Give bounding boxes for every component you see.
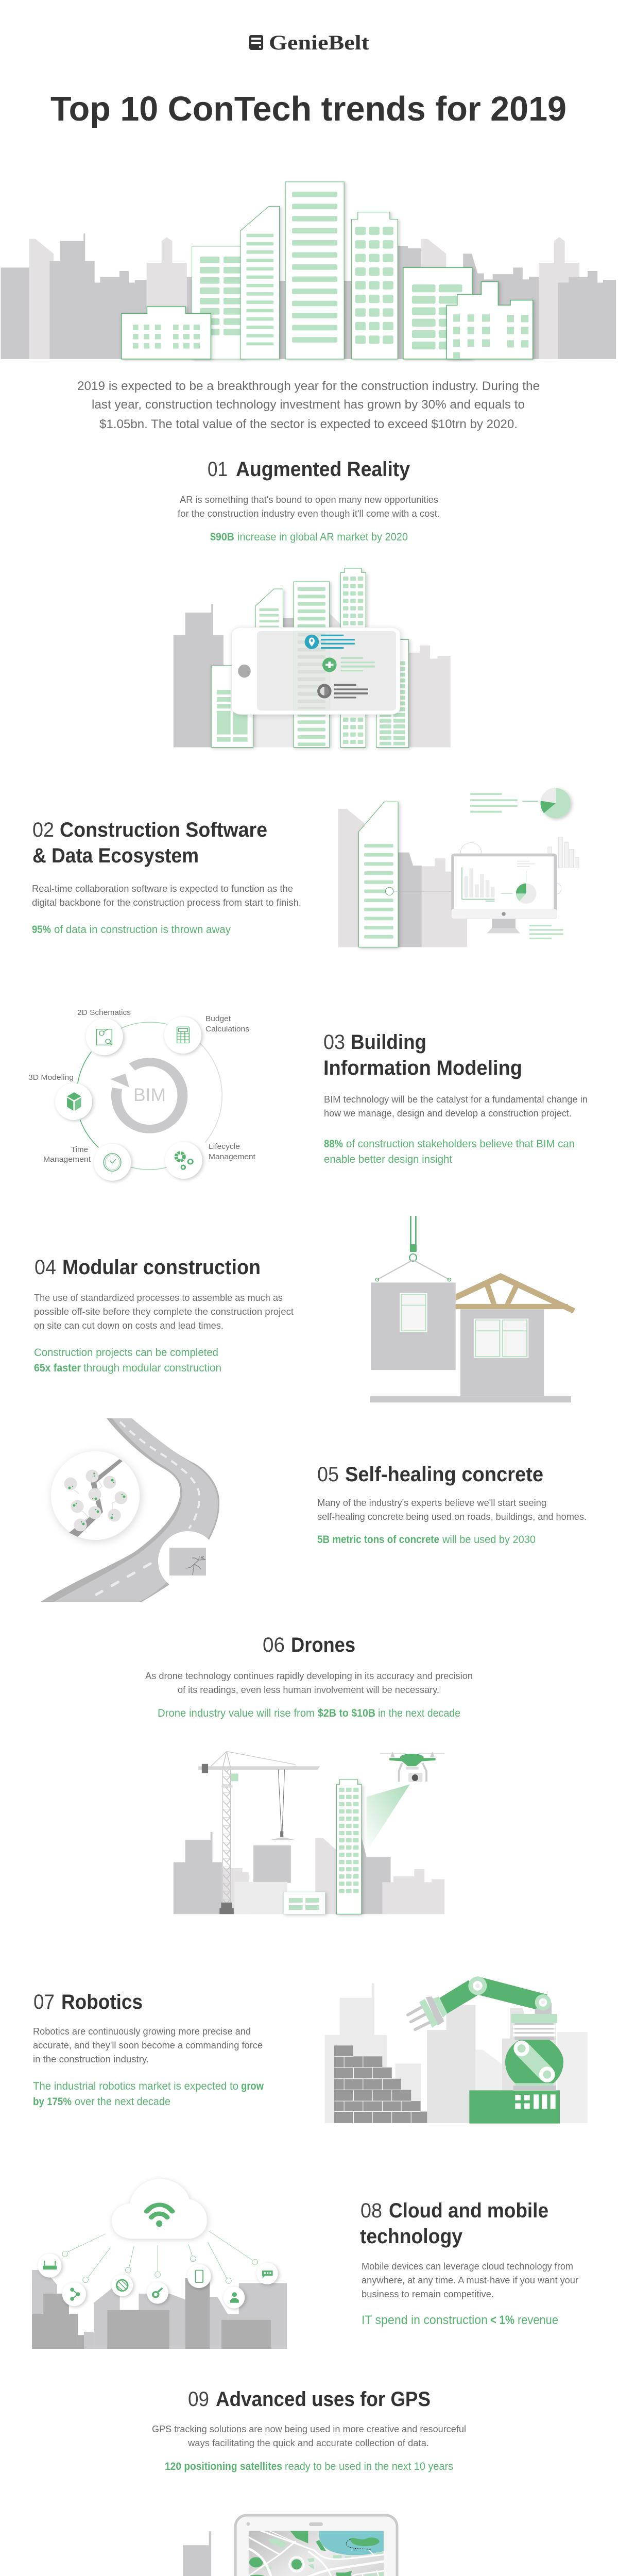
crane hook (375, 1216, 451, 1281)
cloud with wifi (112, 2179, 207, 2239)
body text: in the construction industry. (33, 2054, 149, 2064)
node labels: 2D Schematics (77, 1008, 131, 1017)
background buildings (338, 809, 467, 947)
intro text: last year, construction technology investment has grown by 30% and equals to (92, 398, 525, 412)
heading (323, 1031, 522, 1079)
robot base (469, 2083, 560, 2124)
body text: AR is something that's bound to open many new opportunities (180, 495, 438, 505)
stat (317, 1534, 536, 1546)
body text: Many of the industry's experts believe we'll start seeing (317, 1498, 546, 1508)
body text (34, 1293, 294, 1331)
stat: IT spend in construction (362, 2313, 488, 2327)
stat (165, 2461, 453, 2472)
icon: phone (187, 2264, 211, 2288)
illustration: robot arm laying bricks (325, 1976, 588, 2124)
stat (33, 2080, 264, 2108)
green outlined buildings (211, 568, 409, 748)
heading: Augmented Reality (236, 458, 410, 481)
concrete sample circle (158, 1531, 218, 1591)
panel: 03 Building Information Modeling (28, 1008, 588, 1181)
intro text: $1.05bn. The total value of the sector is expected to exceed $10trn by 2020. (99, 417, 518, 431)
outer ring (78, 1022, 222, 1170)
title: Top 10 ConTech trends for 2019 (50, 90, 566, 128)
panel: 08 Cloud and mobile technology (32, 2179, 578, 2349)
stat: $2B to $10B (318, 1707, 375, 1719)
panel: 05 Self-healing concrete (41, 1418, 587, 1602)
body text (178, 495, 440, 519)
parks and pitch (249, 2531, 352, 2576)
node labels: Calculations (205, 1025, 249, 1033)
heading: Construction Software (60, 819, 267, 841)
roads (249, 2531, 384, 2576)
icon: gears (461, 843, 561, 894)
left background building and brick wall (325, 1984, 431, 2123)
body text: of its readings, even less human involvement will be necessary. (178, 1685, 439, 1695)
scan beam (367, 1784, 410, 1852)
robot and right background (408, 1976, 588, 2124)
stat: in the next decade (378, 1707, 460, 1719)
node labels: Management (43, 1155, 91, 1164)
heading: Cloud and mobile (389, 2199, 548, 2222)
illustration: modular house and crane hook (370, 1216, 575, 1402)
body text: on site can cut down on costs and lead times. (34, 1320, 224, 1331)
connection lines (62, 2231, 258, 2283)
stat: 95% (32, 924, 51, 936)
stat: $90B (210, 531, 234, 543)
stat (362, 2313, 558, 2327)
illustration: phone over city (174, 568, 451, 748)
heading: 06 (263, 1634, 285, 1656)
icon: chat (256, 2263, 278, 2284)
heading: Self-healing concrete (345, 1463, 543, 1486)
heading: Information Modeling (323, 1057, 522, 1079)
map (249, 2531, 384, 2576)
roof truss (456, 1273, 575, 1313)
heading: Advanced uses for GPS (216, 2388, 431, 2411)
lake (316, 2531, 384, 2555)
gripper (408, 1996, 448, 2029)
magnified crack circle (51, 1451, 140, 1540)
node: 2D schematics (86, 1019, 123, 1055)
node labels: Lifecycle (209, 1142, 240, 1151)
icon: key (147, 2282, 168, 2304)
wordmark: GenieBelt (269, 31, 370, 54)
label lines under monitor (529, 925, 563, 939)
panel: 02 Construction Software and Data Ecosystem (32, 788, 579, 947)
panel: 09 Advanced uses for GPS (152, 2388, 466, 2576)
stat (158, 1707, 460, 1719)
panel: 04 Modular construction (34, 1216, 575, 1402)
panel: 06 Drones (145, 1634, 473, 1914)
stat: by 175% (33, 2096, 72, 2108)
icon: globe (112, 2275, 133, 2296)
brick wall (334, 2045, 431, 2123)
body text: business to remain competitive. (362, 2289, 494, 2299)
stat: 65x faster (34, 1362, 81, 1374)
stat: ready to be used in the next 10 years (285, 2461, 453, 2472)
robot body sphere (505, 2040, 563, 2083)
stat: 88% (324, 1138, 343, 1150)
crane (198, 1752, 320, 1914)
body text (33, 2026, 263, 2064)
tablet body (235, 2515, 397, 2576)
background buildings (174, 604, 451, 748)
stat: Construction projects can be completed (34, 1347, 218, 1359)
road (41, 1418, 219, 1602)
stat: increase in global AR market by 2020 (237, 531, 408, 543)
background buildings (165, 2531, 452, 2576)
stat (34, 1347, 221, 1374)
intro text (77, 379, 540, 431)
stat: over the next decade (75, 2096, 170, 2108)
heading: 04 (35, 1256, 56, 1279)
green tall building (358, 802, 451, 947)
body text: how we manage, design and develop a construction project. (324, 1108, 572, 1118)
body text: The use of standardized processes to assemble as much as (34, 1293, 283, 1303)
node labels: 3D Modeling (28, 1073, 74, 1082)
stat: enable better design insight (324, 1154, 452, 1165)
body text (317, 1498, 587, 1522)
skyline (32, 2270, 287, 2349)
icon: plus with label lines (322, 657, 375, 672)
BIM label: BIM (133, 1085, 166, 1105)
node: time management (94, 1144, 131, 1181)
body text: digital backbone for the construction process from start to finish. (32, 897, 301, 908)
stat: of data in construction is thrown away (54, 924, 231, 936)
heading: Drones (291, 1634, 355, 1656)
body text: possible off-site before they complete the construction project (34, 1307, 294, 1317)
stat: The industrial robotics market is expected to (33, 2080, 238, 2092)
illustration: building and monitor dashboards (338, 788, 579, 947)
panel: 07 Robotics (33, 1976, 588, 2124)
heading (263, 1634, 355, 1656)
body text: GPS tracking solutions are now being used in more creative and resourceful (152, 2424, 466, 2434)
body text: self-healing concrete being used on roads, buildings, and homes. (317, 1512, 587, 1522)
icon: share (62, 2282, 86, 2306)
heading: 09 (188, 2388, 209, 2411)
body text: for the construction industry even though it'll come with a cost. (178, 509, 440, 519)
node labels: Budget (205, 1014, 231, 1023)
body text: BIM technology will be the catalyst for a fundamental change in (324, 1094, 588, 1105)
stat: through modular construction (83, 1362, 221, 1374)
body text: As drone technology continues rapidly developing in its accuracy and precision (145, 1671, 473, 1681)
device icons (38, 2254, 278, 2309)
grey background skyline (1, 233, 616, 359)
intro text: 2019 is expected to be a breakthrough year for the construction industry. During the (77, 379, 540, 393)
robot arm segments (439, 1976, 551, 2013)
monitor (451, 854, 557, 934)
stat: 5B metric tons of concrete (317, 1534, 439, 1546)
house body (370, 1309, 571, 1402)
icon: location pin with label lines (305, 635, 355, 649)
heading: & Data Ecosystem (32, 844, 199, 867)
body text (362, 2261, 578, 2299)
illustration: road with crack and bacteria (41, 1418, 219, 1602)
cycle graphics (55, 1016, 222, 1181)
white buildings with green windows (122, 182, 533, 359)
stat: < 1% (490, 2313, 514, 2327)
top right pie and label lines (470, 788, 571, 818)
background buildings (174, 1832, 444, 1914)
monitor chart (462, 861, 537, 904)
node: 3D modeling (55, 1083, 92, 1120)
stat: Drone industry value will rise from (158, 1707, 315, 1719)
stat: will be used by 2030 (442, 1534, 536, 1546)
heading: Modular construction (62, 1256, 261, 1279)
heading: 01 (208, 458, 228, 481)
node labels (28, 1008, 256, 1164)
heading: 05 (317, 1463, 339, 1486)
icon: logo mark (249, 35, 263, 50)
robot neck (511, 2003, 557, 2040)
heading: 08 (360, 2199, 382, 2222)
body text: Mobile devices can leverage cloud technology from (362, 2261, 573, 2272)
stat: grow (241, 2080, 264, 2092)
illustration: tablet with map over city (183, 2514, 399, 2576)
BIM cycle diagram (28, 1008, 256, 1181)
stat: revenue (518, 2313, 558, 2327)
buildings on map (264, 2538, 384, 2576)
body text: anywhere, at any time. A must-have if you want your (362, 2275, 578, 2285)
body text: ways facilitating the quick and accurate collection of data. (187, 2438, 429, 2448)
icon: chart with label lines (317, 684, 368, 699)
illustration: cloud with connected devices (32, 2179, 287, 2349)
body text: Real-time collaboration software is expected to function as the (32, 884, 293, 894)
stat (324, 1138, 575, 1165)
node: lifecycle management (165, 1142, 202, 1179)
heading: 07 (33, 1991, 55, 2013)
body text (324, 1094, 588, 1118)
centre arrow (110, 1062, 182, 1129)
heading (360, 2199, 548, 2248)
body text (145, 1671, 473, 1695)
illustration: drone surveying construction site (174, 1752, 444, 1914)
heading: 03 (323, 1031, 345, 1054)
node labels: Management (209, 1153, 256, 1161)
green buildings (283, 1780, 362, 1914)
hero illustration: city skyline (1, 182, 616, 359)
node labels: Time (71, 1145, 88, 1154)
icon: person (224, 2286, 245, 2309)
background buildings right (427, 2005, 588, 2123)
heading: Building (351, 1031, 426, 1054)
panel: 01 Augmented Reality (174, 458, 451, 748)
stat: 120 positioning satellites (165, 2461, 282, 2472)
stat: of construction stakeholders believe that BIM can (346, 1138, 575, 1150)
body text (152, 2424, 466, 2448)
background buildings left (325, 1984, 421, 2123)
body text: accurate, and they'll soon become a commanding force (33, 2040, 263, 2050)
icon: router (38, 2254, 61, 2278)
heading: technology (360, 2225, 463, 2248)
body text (32, 884, 301, 908)
phone (232, 628, 400, 715)
prefabricated module (371, 1282, 456, 1370)
heading (32, 819, 267, 867)
heading: 02 (32, 819, 54, 841)
drone (380, 1752, 444, 1782)
node: budget calculations (164, 1016, 201, 1054)
heading: Robotics (61, 1991, 143, 2013)
body text: Robotics are continuously growing more precise and (33, 2026, 251, 2037)
top right bars (548, 837, 579, 868)
logo: GenieBelt (249, 31, 370, 54)
